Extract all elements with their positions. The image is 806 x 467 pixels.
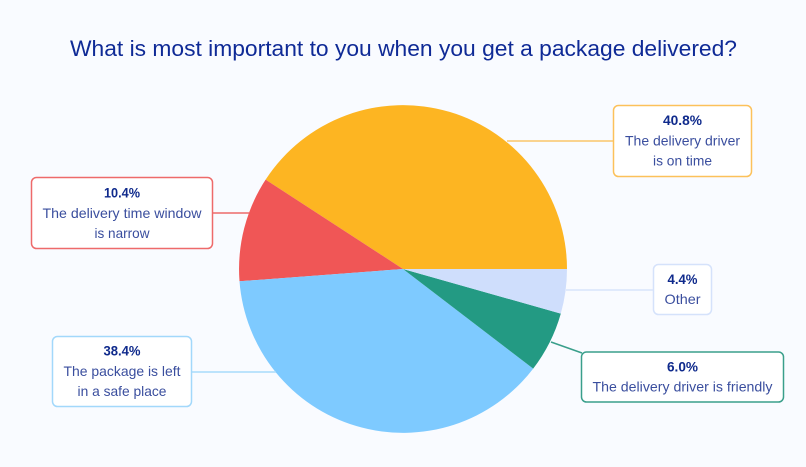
slice: on time 40.8% xyxy=(266,105,567,269)
callout: other: Other xyxy=(664,291,701,307)
title: What is most important to you when you get a package delivered? xyxy=(70,36,737,61)
callout: safe place: The package is left xyxy=(64,363,181,379)
slice: other 4.4% xyxy=(403,269,567,314)
callout: friendly: The delivery driver is friendly xyxy=(592,378,772,394)
slice: friendly 6.0% xyxy=(403,269,561,369)
callout: friendly: 6.0% xyxy=(667,358,699,374)
slice: time window 10.4% xyxy=(239,180,403,281)
callout: other xyxy=(566,264,712,314)
callout: on time: is on time xyxy=(653,152,712,168)
slice: safe place 38.4% xyxy=(240,269,533,433)
callout: other: 4.4% xyxy=(668,271,698,287)
pie chart xyxy=(239,105,567,433)
callout: safe place: in a safe place xyxy=(78,383,167,399)
callout: on time: 40.8% xyxy=(663,112,703,128)
callout: safe place xyxy=(52,336,276,406)
callout: time window xyxy=(32,178,249,248)
callout: time window: 10.4% xyxy=(104,184,140,200)
callout: time window: The delivery time window xyxy=(42,205,202,221)
callout: on time xyxy=(507,106,752,176)
callout: on time: The delivery driver xyxy=(625,132,740,148)
callout: friendly xyxy=(551,342,784,402)
callout: safe place: 38.4% xyxy=(104,342,141,358)
callout: time window: is narrow xyxy=(94,225,150,241)
